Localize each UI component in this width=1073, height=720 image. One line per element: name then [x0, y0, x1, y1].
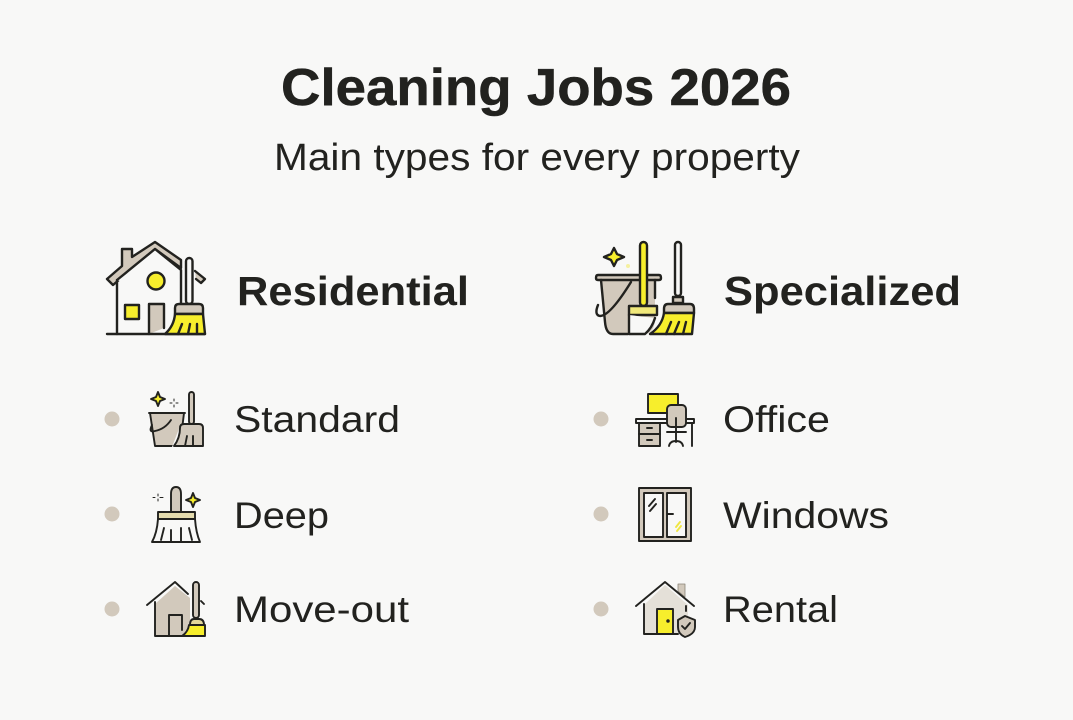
- label: Office: [723, 399, 830, 440]
- list item: Standard: [104, 392, 400, 448]
- icon: house with shield: [636, 582, 695, 637]
- list item: Windows: [594, 488, 889, 541]
- bullet: [594, 602, 608, 616]
- icon: desk and chair: [636, 394, 694, 446]
- label: Deep: [234, 495, 329, 536]
- icon: bucket and brush: [149, 392, 205, 448]
- label: Standard: [234, 399, 400, 440]
- bullet: [594, 506, 608, 522]
- bullet: [594, 412, 608, 426]
- list item: Deep: [104, 487, 329, 542]
- heading: Residential: Residential: [237, 268, 469, 314]
- icon: house with broom: [147, 582, 205, 636]
- icon: house with broom: [107, 242, 205, 334]
- panel: residential: [104, 242, 469, 636]
- icon: brush: [152, 487, 200, 542]
- icon: window: [639, 488, 691, 541]
- list item: Office: [594, 394, 830, 446]
- bullet: [104, 506, 120, 522]
- bullet: [104, 412, 120, 426]
- icon: bucket, mop and broom: [596, 242, 694, 334]
- heading: Specialized: Specialized: [724, 268, 961, 314]
- label: Rental: [723, 589, 838, 630]
- list item: Rental: [594, 582, 838, 637]
- label: Move-out: [234, 589, 410, 630]
- panel: specialized: [594, 242, 961, 637]
- list item: Move-out: [104, 582, 410, 636]
- title: Cleaning Jobs 2026: [281, 59, 791, 117]
- bullet: [104, 602, 120, 616]
- label: Windows: [723, 495, 889, 536]
- subtitle: Main types for every property: [274, 137, 800, 179]
